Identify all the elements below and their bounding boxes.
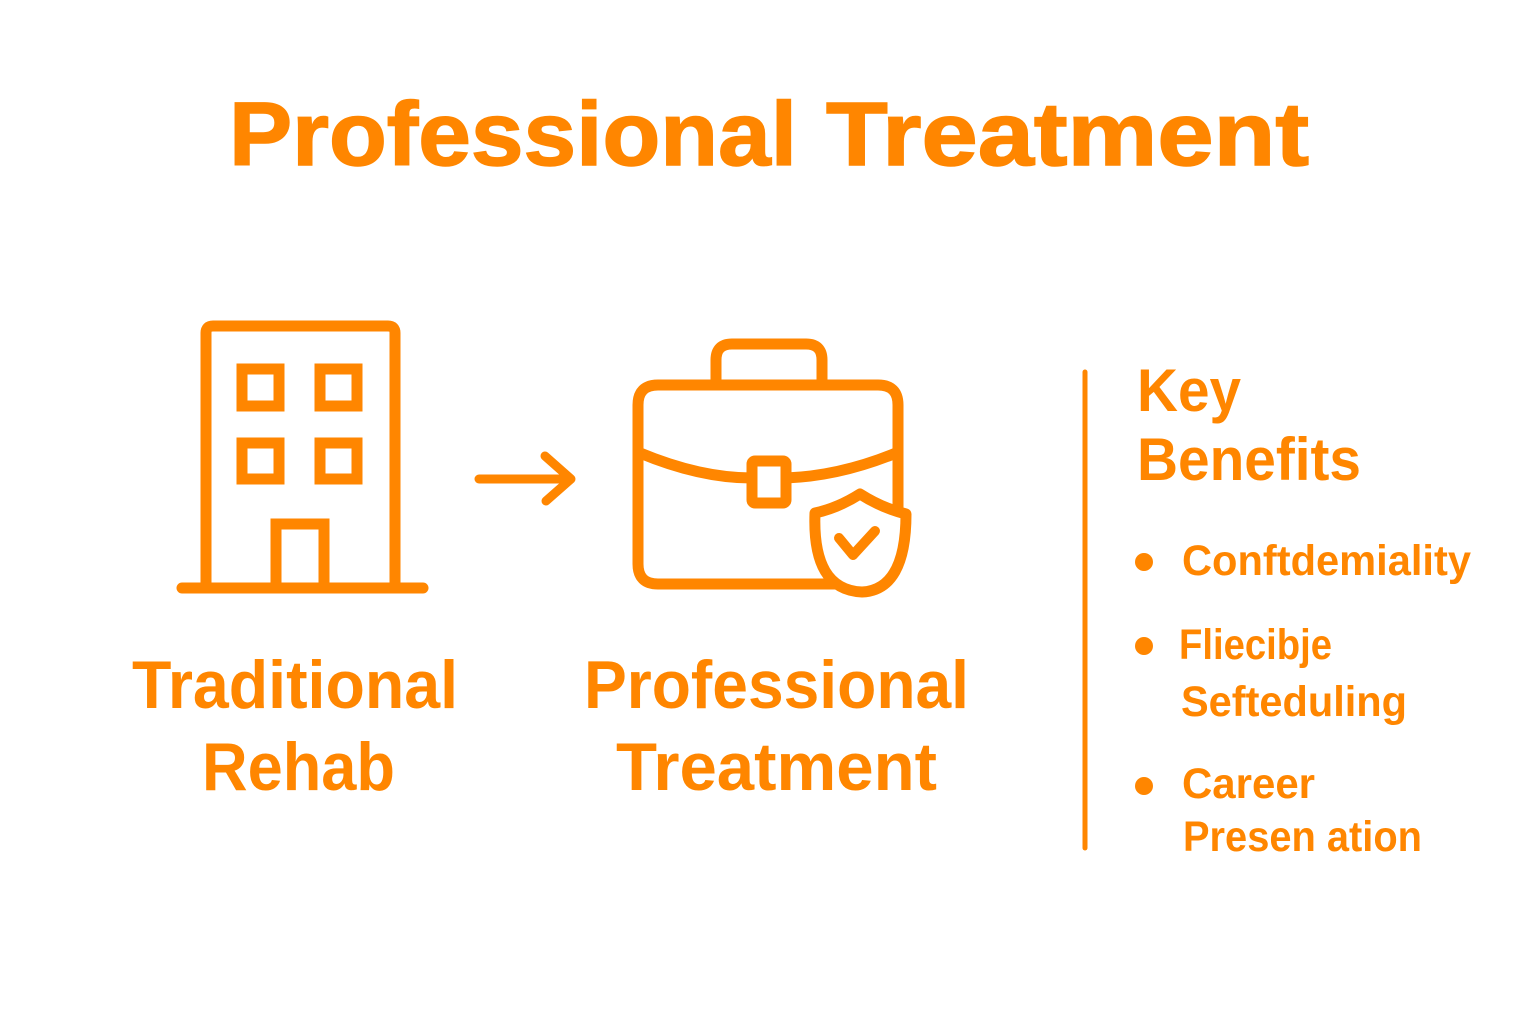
label: professional treatment: Treatment bbox=[616, 729, 937, 805]
bullet: career preservation: Presen ation bbox=[1183, 813, 1422, 861]
label: professional treatment bbox=[584, 647, 969, 805]
bullet: career preservation: Career bbox=[1182, 760, 1315, 808]
title bbox=[229, 85, 1309, 185]
bullet: flexible scheduling bbox=[1135, 621, 1407, 726]
bullet: flexible scheduling: Sefteduling bbox=[1181, 678, 1407, 726]
icon: office building bbox=[182, 326, 423, 588]
label: traditional rehab bbox=[132, 647, 458, 805]
title: Treatment bbox=[826, 85, 1309, 185]
icon: briefcase with shield bbox=[638, 344, 906, 592]
bullet: flexible scheduling: Fliecibje bbox=[1179, 621, 1332, 669]
label: professional treatment: Professional bbox=[584, 647, 969, 723]
label: traditional rehab: Traditional bbox=[132, 647, 458, 723]
bullet: confidentiality: Conftdemiality bbox=[1182, 537, 1471, 585]
label: traditional rehab: Rehab bbox=[202, 729, 395, 805]
heading: key benefits: Key bbox=[1137, 357, 1242, 424]
vertical divider bbox=[1082, 372, 1088, 848]
heading: key benefits bbox=[1137, 357, 1361, 493]
heading: key benefits: Benefits bbox=[1137, 426, 1361, 493]
title: Professional bbox=[229, 85, 797, 185]
bullet: career preservation bbox=[1135, 760, 1422, 861]
arrow bbox=[479, 456, 571, 501]
benefits list bbox=[1135, 537, 1471, 861]
